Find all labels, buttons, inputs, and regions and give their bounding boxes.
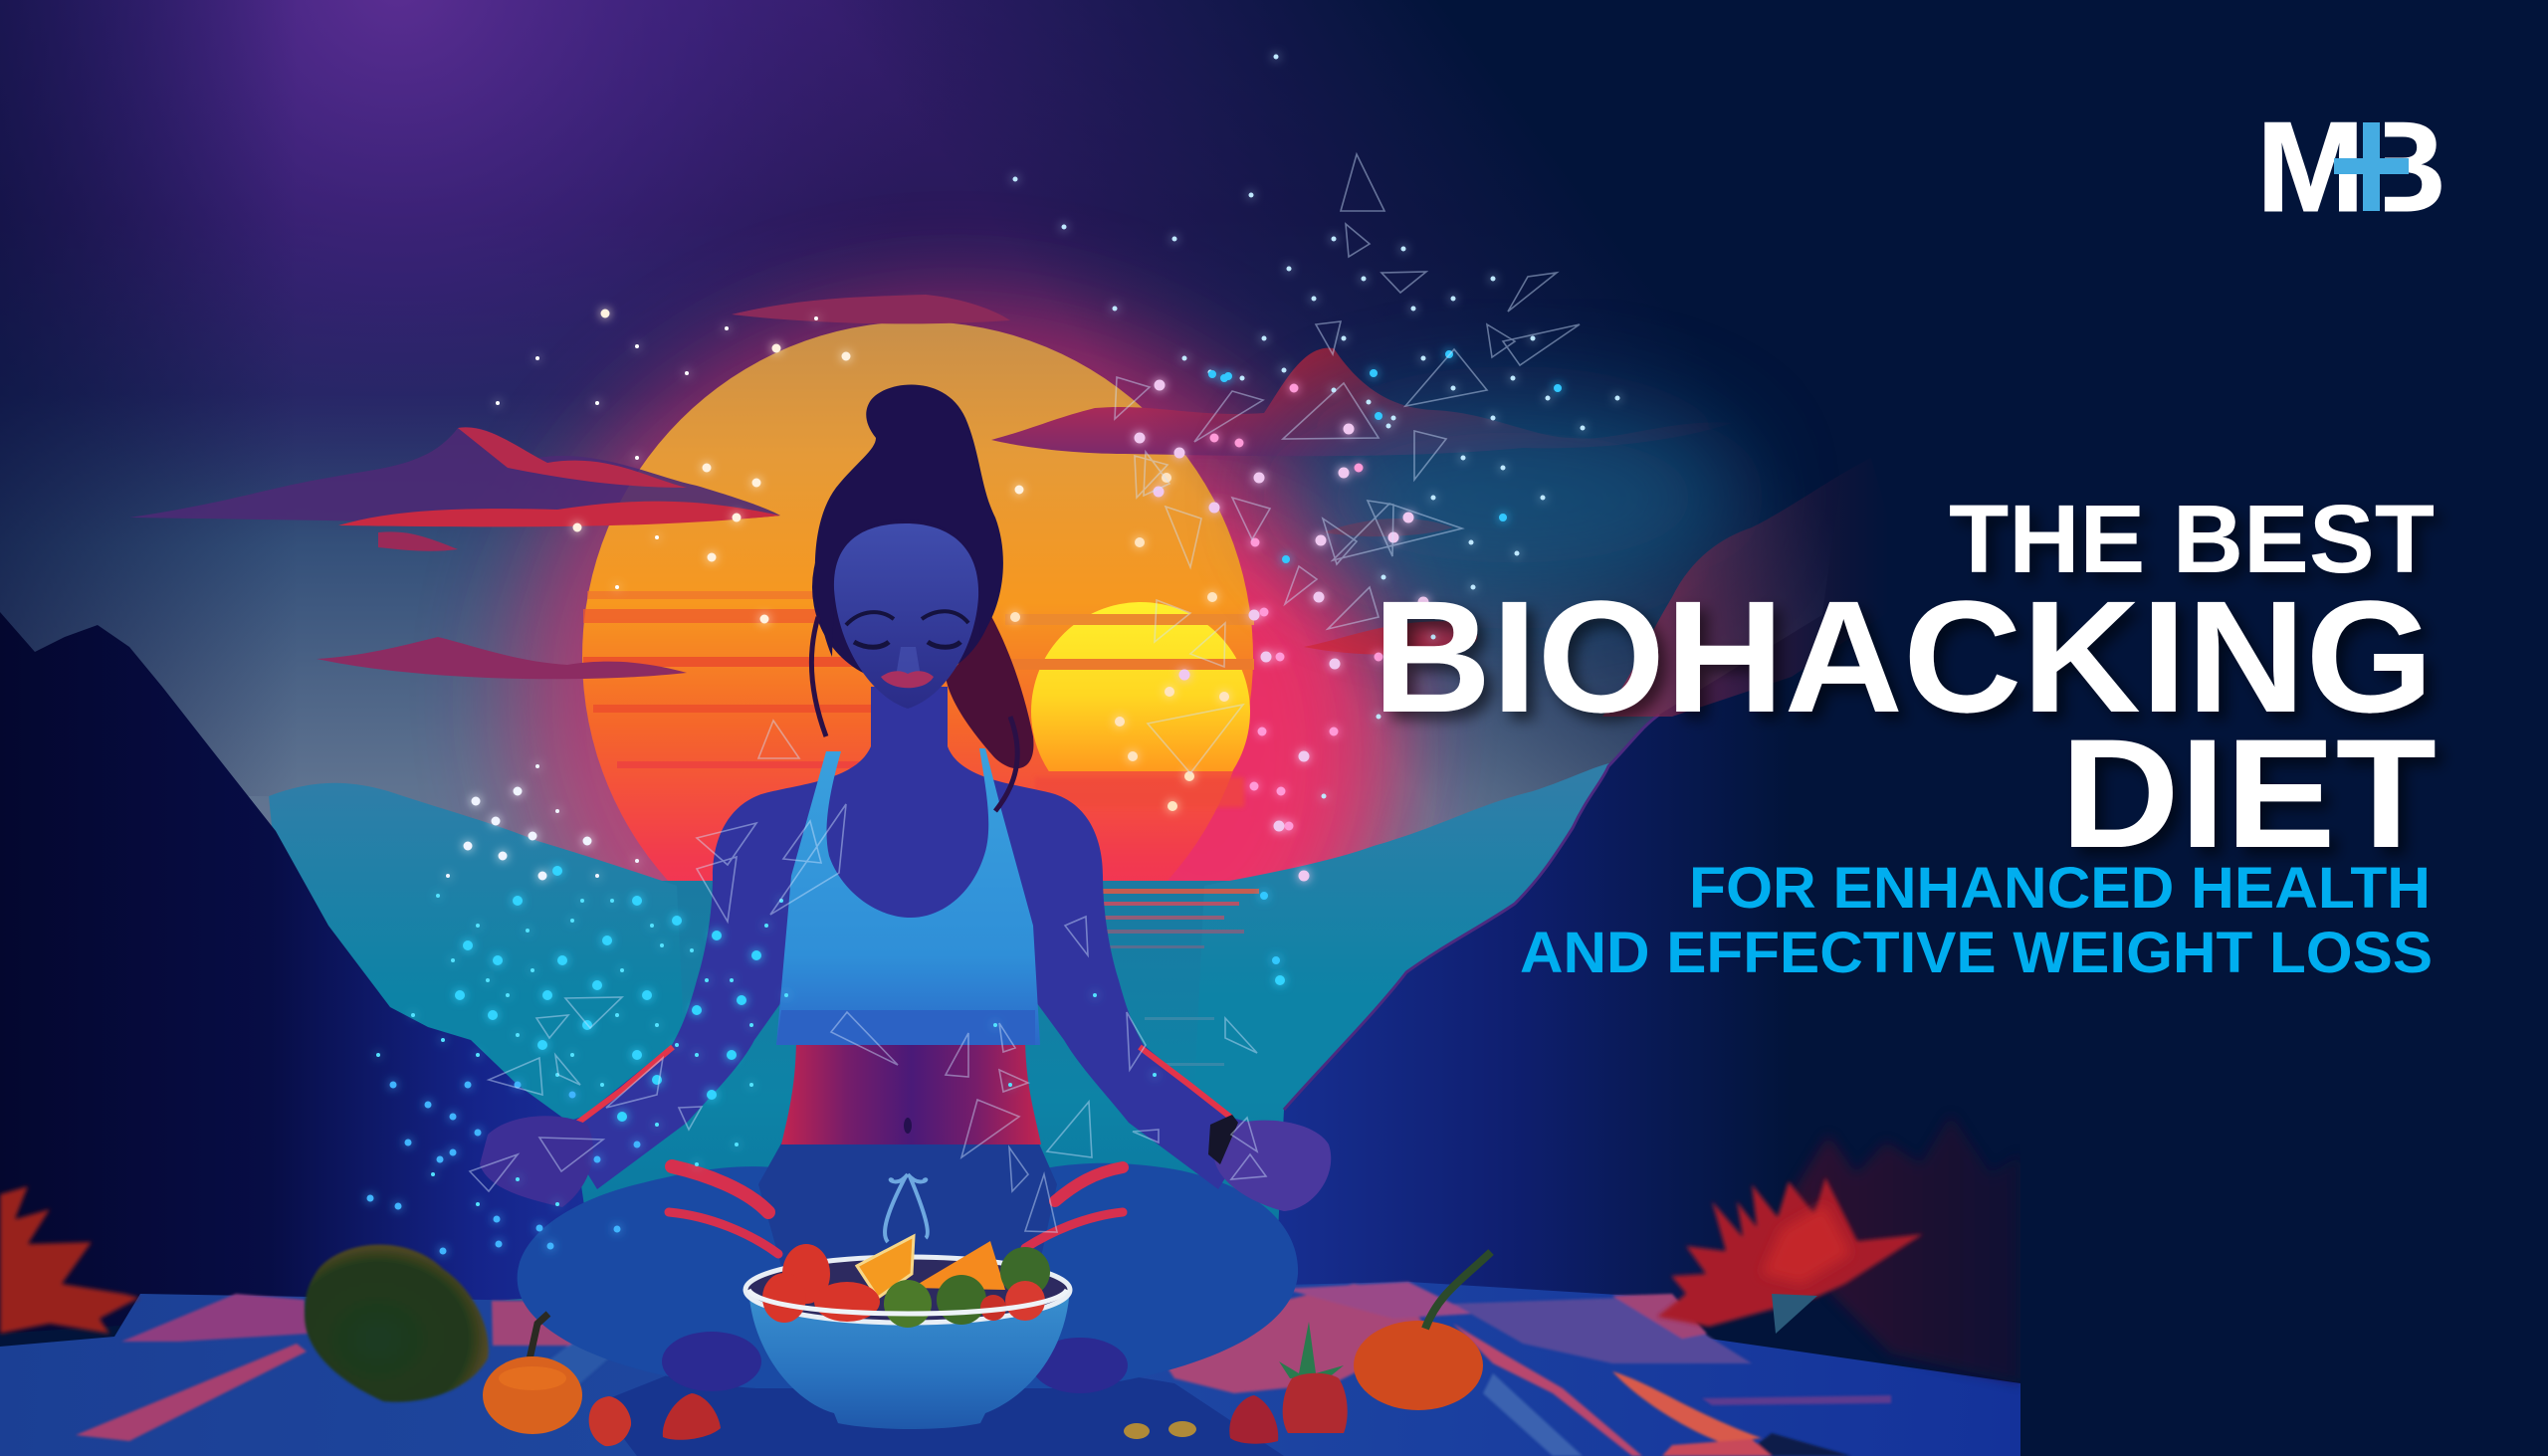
constellation triangles: [470, 154, 1580, 1232]
avocado: [305, 1245, 489, 1402]
left distant hill: [269, 783, 687, 1095]
thigh red highlights: [669, 1166, 1123, 1254]
nose: [896, 647, 921, 677]
right hand: [1214, 1121, 1331, 1211]
sun reflection on water: [1080, 889, 1259, 1066]
tank top: [776, 748, 1040, 1045]
watch: [1208, 1115, 1238, 1164]
strawberries and citrus: [762, 1236, 1050, 1328]
eyebrows: [846, 611, 968, 625]
red leafy plant right: [1657, 1115, 2020, 1383]
face: [834, 523, 978, 709]
floating particles: cyan lower left: [370, 766, 1280, 1251]
dark blue mat under bowl: [613, 1375, 1284, 1456]
strawberry: [589, 1396, 631, 1446]
bowl body: [748, 1287, 1070, 1429]
right mountain ridge edge: [1284, 715, 1659, 1110]
pineapple shaped berry: [1279, 1322, 1348, 1433]
nuts: [1124, 1421, 1196, 1439]
small bright sun disc: [1031, 602, 1250, 771]
logo M+B: M: [2256, 96, 2365, 239]
front rim highlight: [748, 1290, 1067, 1314]
feet: [662, 1332, 1128, 1393]
small pumpkin left: [483, 1314, 582, 1434]
right distant hill: [1194, 761, 1632, 1095]
logo M+B: B: [2355, 96, 2446, 239]
red leafy plant left: [0, 1186, 139, 1334]
hair and top bun: [815, 384, 1003, 657]
meditating woman: [480, 384, 1331, 1393]
navy mask beyond the picture: [1742, 478, 2548, 1194]
left hand: [480, 1116, 593, 1207]
sea: [299, 881, 1692, 1319]
bowl of fruit: [745, 1236, 1070, 1429]
strawberry right: [1229, 1395, 1278, 1444]
hair wisps: [811, 617, 1017, 811]
midriff: [781, 1035, 1041, 1144]
subtitle line two: AND EFFECTIVE WEIGHT LOSS: [1520, 921, 2433, 985]
legs crossed: [518, 1163, 1298, 1388]
ponytail: [946, 597, 1033, 768]
pink floor stripes: [76, 1282, 1891, 1456]
distant teal hills and sea: [269, 761, 1692, 1319]
lips: [881, 671, 934, 688]
left dark mountain: [0, 612, 597, 1334]
teal haze in the right sky: [1284, 398, 1742, 597]
floating particles: around sun top: [498, 313, 1019, 619]
floating particles: upper right: [1015, 57, 1617, 960]
title line: biohacking: BIOHACKING: [1373, 567, 2434, 745]
floor with striped mat: [0, 1282, 2020, 1456]
produce on the floor: [305, 1245, 1491, 1446]
setting sun with red glow: [518, 299, 1393, 1095]
sun horizontal bands: [583, 591, 1254, 807]
arm red rims: [575, 1047, 1231, 1125]
hair backing: [812, 492, 995, 683]
chest, shoulders and arms: [557, 687, 1258, 1189]
shorts: [758, 1135, 1057, 1284]
drawstring: [885, 1174, 928, 1242]
belly button: [904, 1118, 912, 1134]
sunset clouds: [129, 295, 1732, 679]
large pumpkin right: [1354, 1252, 1491, 1410]
strawberry: [663, 1393, 721, 1440]
title block: [1373, 485, 2437, 985]
subtitle line one: FOR ENHANCED HEALTH: [1689, 856, 2431, 921]
right mountain: [1274, 597, 2020, 1314]
right dark red cloud: [1602, 458, 1911, 717]
title line: the best: THE BEST: [1949, 485, 2435, 593]
sky gradient: [0, 0, 2020, 1095]
closed eyes: [854, 642, 960, 647]
tank hem band: [776, 1010, 1035, 1045]
title line: diet: DIET: [2060, 708, 2437, 881]
bowl rim: [745, 1257, 1070, 1323]
right side fade to navy: [0, 0, 2020, 1095]
logo M+B: [2256, 96, 2446, 239]
